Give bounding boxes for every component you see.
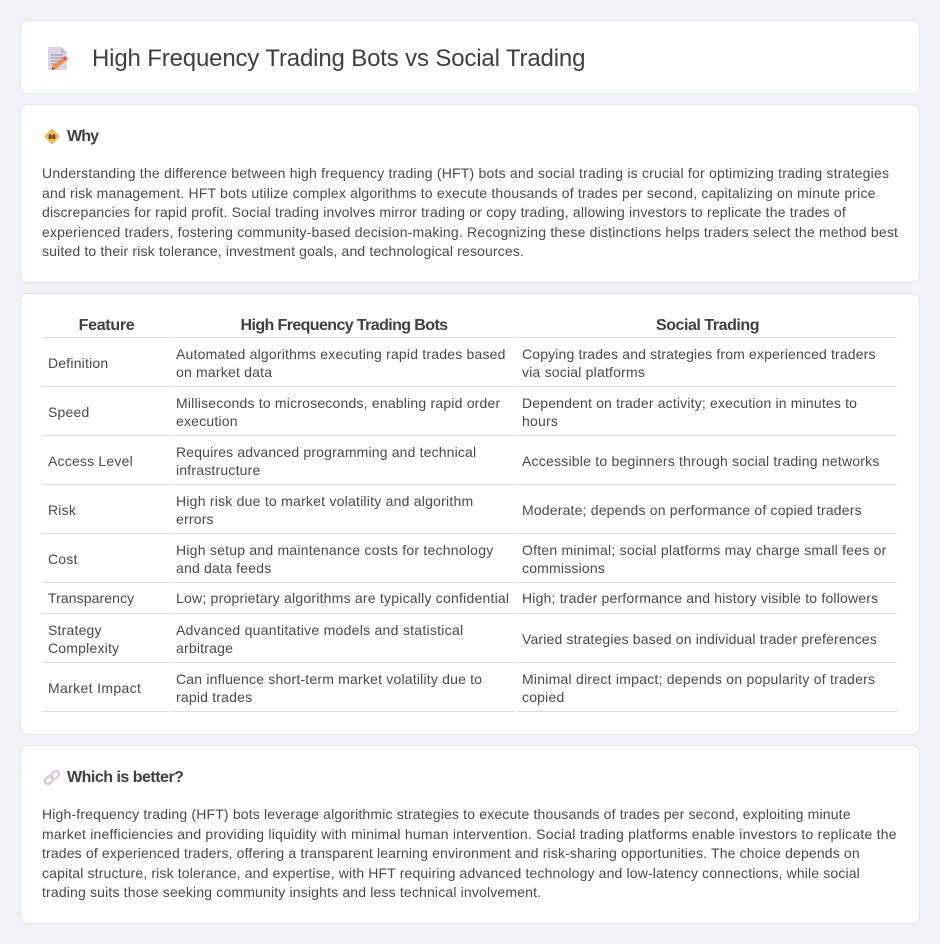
table header: Social Trading	[656, 317, 759, 334]
row: access level	[48, 444, 880, 478]
row: market impact: Can influence short-term market volatility due to	[176, 671, 482, 687]
title: High Frequency Trading Bots vs Social Trading	[92, 45, 585, 72]
row: risk	[48, 493, 862, 527]
panel: comparison table	[20, 293, 920, 735]
icon: chain link	[44, 770, 60, 786]
row: market impact: Market Impact	[48, 680, 141, 696]
row: cost	[48, 542, 887, 576]
row: access level: Access Level	[48, 453, 133, 469]
icon: warning diamond	[44, 129, 60, 144]
row: definition: Automated algorithms executing rapid trades based	[176, 346, 506, 362]
row: speed: Milliseconds to microseconds, enabling rapid order	[176, 395, 500, 411]
row: market impact: rapid trades	[176, 689, 252, 705]
row: transparency: High; trader performance and history visible to followers	[522, 590, 878, 606]
text block: why: Understanding the difference between high frequency trading (HFT) bots and social trading is crucial for optimizing trading strategies	[42, 165, 889, 181]
row: strategy complexity: Advanced quantitative models and statistical	[176, 622, 463, 638]
text block: which is better: trading suits those seeking community insights and less technical involvement.	[42, 884, 541, 900]
row: risk: errors	[176, 511, 214, 527]
row: market impact: copied	[522, 689, 564, 705]
row: speed: hours	[522, 413, 558, 429]
row: cost: and data feeds	[176, 560, 271, 576]
panel: header	[20, 20, 920, 94]
heading: which is better: Which is better?	[67, 769, 183, 786]
row: market impact: Minimal direct impact; depends on popularity of traders	[522, 671, 875, 687]
row: access level: infrastructure	[176, 462, 260, 478]
text block: which is better: High-frequency trading (HFT) bots leverage algorithmic strategies to execute thousands of trades per second, exploiting minute	[42, 806, 851, 822]
row: speed	[48, 395, 857, 429]
text block: why	[42, 165, 898, 259]
text block: why: discrepancies for rapid profit. Social trading involves mirror trading or copy trading, allowing investors to replicate the trades of	[42, 204, 846, 220]
row: speed: Dependent on trader activity; execution in minutes to	[522, 395, 857, 411]
text block: which is better: market inefficiencies and providing liquidity with minimal human intervention. Social trading platforms enable investors to replicate the	[42, 826, 897, 842]
row: access level: Requires advanced programming and technical	[176, 444, 476, 460]
row: risk: Risk	[48, 502, 76, 518]
row: access level: Accessible to beginners through social trading networks	[522, 453, 880, 469]
row: cost: Often minimal; social platforms may charge small fees or	[522, 542, 887, 558]
text block: why: suited to their risk tolerance, investment goals, and technological resources.	[42, 243, 524, 259]
row: cost: commissions	[522, 560, 605, 576]
row: strategy complexity	[48, 622, 877, 656]
row: risk: Moderate; depends on performance of copied traders	[522, 502, 862, 518]
row: cost: High setup and maintenance costs for technology	[176, 542, 493, 558]
row: transparency: Transparency	[48, 590, 134, 606]
row: definition	[48, 346, 876, 380]
row: strategy complexity: arbitrage	[176, 640, 233, 656]
text block: which is better	[42, 806, 897, 900]
row: market impact	[48, 671, 875, 705]
panel: why	[20, 104, 920, 283]
row: transparency: Low; proprietary algorithms are typically confidential	[176, 590, 509, 606]
text block: why: experienced traders, fostering community-based decision-making. Recognizing these distinctions helps traders select the method best	[42, 224, 898, 240]
row: speed: Speed	[48, 404, 89, 420]
text block: which is better: trades of experienced traders, offering a transparent learning environment and risk-sharing opportunities. The choice depends on	[42, 845, 860, 861]
panel: which is better	[20, 745, 920, 924]
icon: memo with pencil	[48, 47, 68, 70]
table header: Feature	[79, 317, 134, 334]
row: transparency	[48, 590, 878, 606]
row: definition: on market data	[176, 364, 272, 380]
row: strategy complexity: Strategy	[48, 622, 102, 638]
row: definition: Definition	[48, 355, 108, 371]
row: definition: via social platforms	[522, 364, 645, 380]
row: strategy complexity: Complexity	[48, 640, 119, 656]
table header	[79, 317, 759, 334]
row: strategy complexity: Varied strategies based on individual trader preferences	[522, 631, 877, 647]
text block: why: and risk management. HFT bots utilize complex algorithms to execute thousands of trades per second, capitalizing on minute price	[42, 185, 876, 201]
table header: High Frequency Trading Bots	[241, 317, 447, 334]
row: cost: Cost	[48, 551, 78, 567]
text block: which is better: capital structure, risk tolerance, and expertise, with HFT requiring advanced technology and low-latency connections, while social	[42, 865, 860, 881]
row: risk: High risk due to market volatility and algorithm	[176, 493, 473, 509]
row: definition: Copying trades and strategies from experienced traders	[522, 346, 876, 362]
row: speed: execution	[176, 413, 238, 429]
heading: why: Why	[67, 128, 98, 145]
